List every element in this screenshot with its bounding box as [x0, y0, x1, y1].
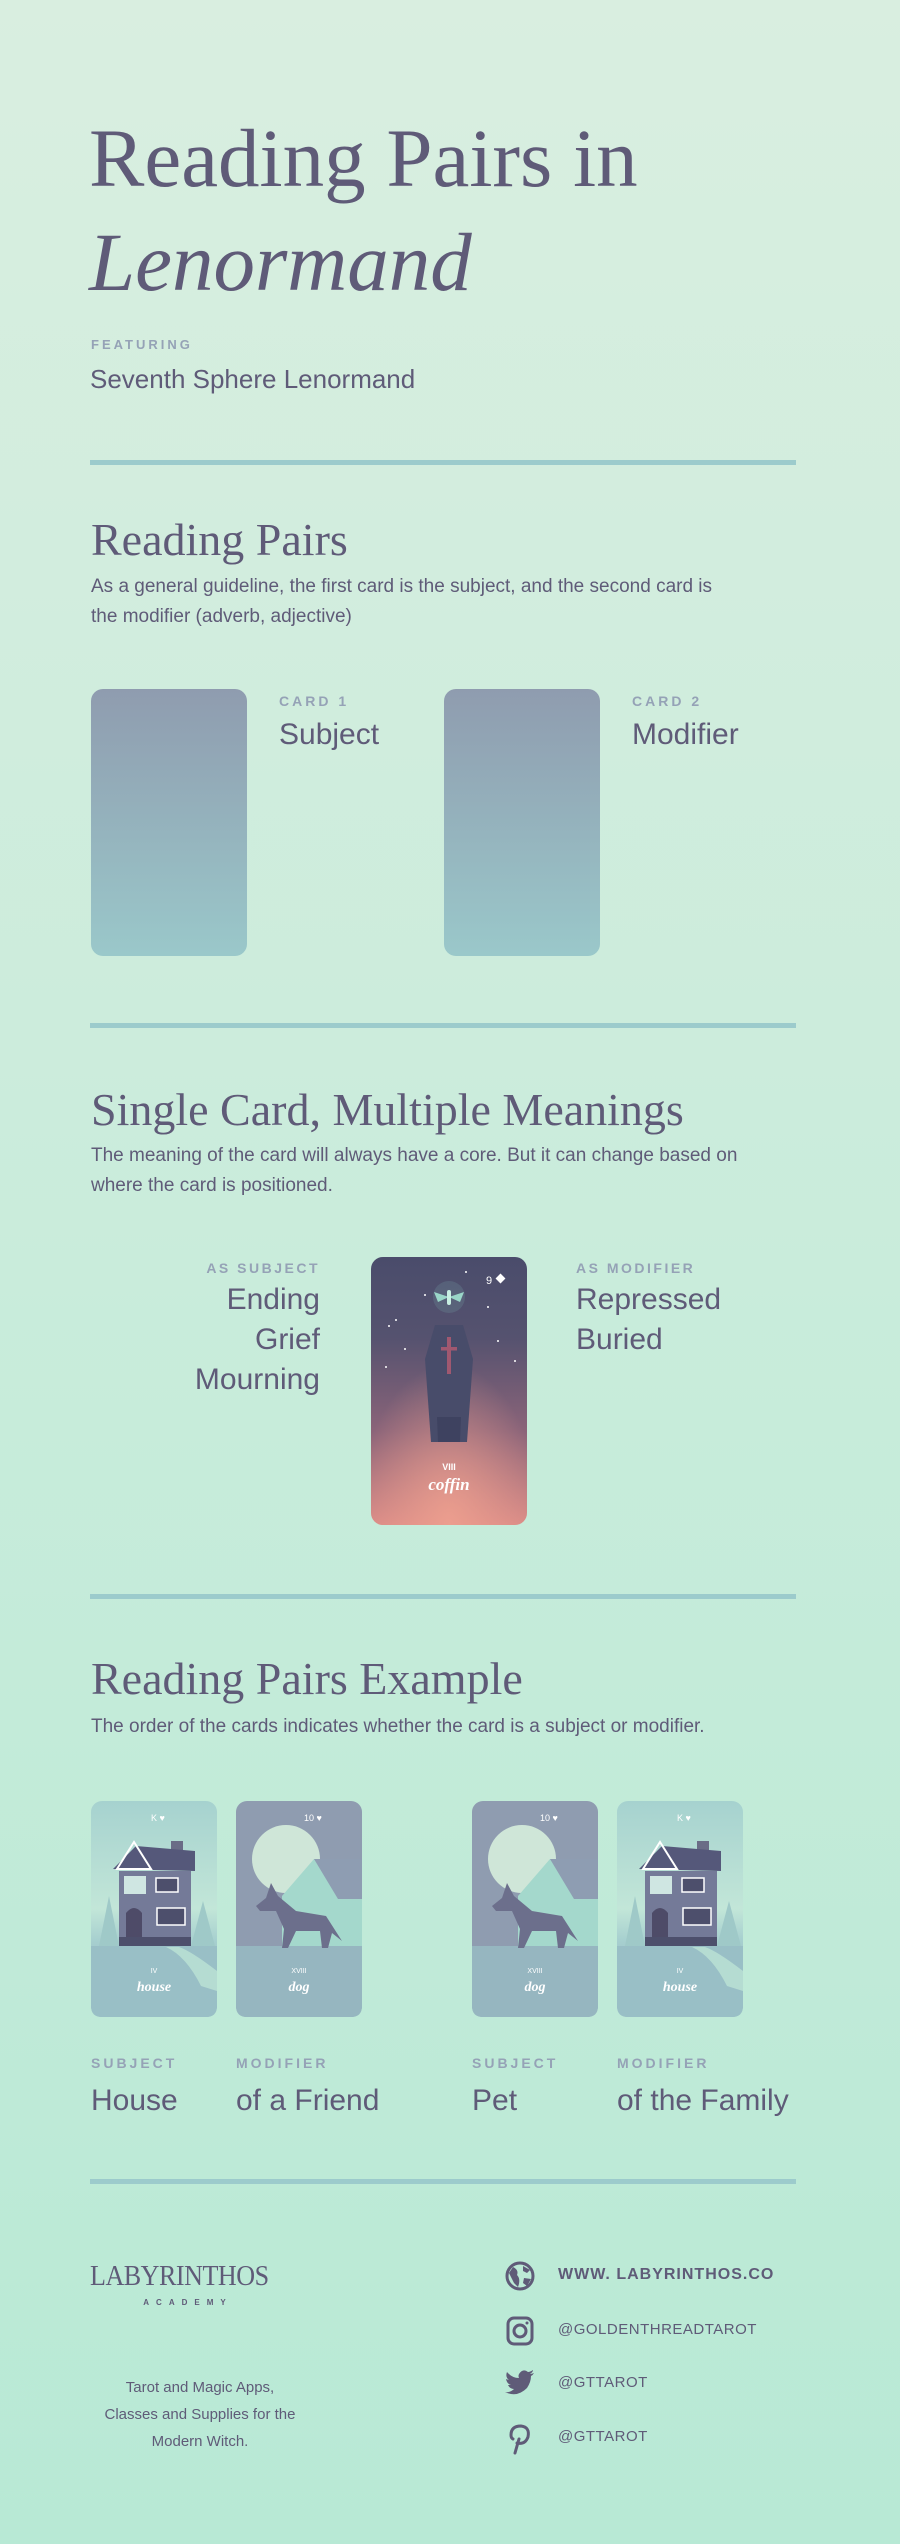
heading: single card: Single Card, Multiple Meanings — [91, 1084, 684, 1135]
icon: instagram — [506, 2316, 534, 2346]
as subject meanings: Grief — [255, 1323, 320, 1356]
card: house — [91, 1801, 217, 2017]
icon: pinterest — [510, 2424, 530, 2454]
example pair 1: House — [91, 2084, 178, 2117]
example pair 2: MODIFIER — [617, 2055, 709, 2071]
card: house: K ♥ — [677, 1813, 691, 1823]
social links — [505, 2262, 774, 2454]
paragraph: single card: where the card is positioned. — [91, 1175, 333, 1196]
example pair 1: of a Friend — [236, 2084, 379, 2117]
paragraph: reading pairs — [91, 576, 712, 627]
example pair 1 — [91, 1801, 379, 2117]
tagline: Classes and Supplies for the — [105, 2406, 295, 2423]
tagline: Modern Witch. — [152, 2433, 248, 2450]
as subject meanings: Mourning — [195, 1363, 320, 1396]
title: Reading Pairs in — [89, 112, 638, 204]
card: dog — [236, 1801, 362, 2017]
paragraph: reading pairs: the modifier (adverb, adjective) — [91, 606, 352, 627]
tagline — [105, 2379, 295, 2450]
card: dog: dog — [524, 1980, 546, 1995]
card: dog: XVIII — [291, 1968, 307, 1975]
card 1 text: Subject — [279, 718, 379, 751]
text: website: WWW. LABYRINTHOS.CO — [558, 2266, 774, 2283]
deck name: Seventh Sphere Lenormand — [90, 364, 415, 394]
example pair 2 — [472, 1801, 789, 2117]
featuring label: FEATURING — [91, 337, 193, 352]
heading: example: Reading Pairs Example — [91, 1653, 523, 1704]
as modifier meanings: Buried — [576, 1323, 663, 1356]
title: Lenormand — [89, 216, 472, 308]
paragraph: single card — [91, 1145, 737, 1196]
card 1 blank — [91, 689, 247, 956]
coffin card — [371, 1257, 527, 1525]
title — [88, 112, 638, 308]
card: dog: 10 ♥ — [540, 1813, 558, 1823]
example pair 2: Pet — [472, 2084, 517, 2117]
logo — [90, 2261, 269, 2307]
card: house: IV — [677, 1968, 684, 1975]
logo: ACADEMY — [143, 2298, 233, 2307]
card 2 text — [632, 693, 739, 751]
labels pair 2: SUBJECT — [472, 2055, 558, 2071]
as subject meanings — [195, 1260, 320, 1396]
card 2 text: Modifier — [632, 718, 739, 751]
card 2 text: CARD 2 — [632, 693, 702, 709]
icon: twitter — [505, 2370, 534, 2394]
card: house: K ♥ — [151, 1813, 165, 1823]
card: house: IV — [151, 1968, 158, 1975]
card 2 blank — [444, 689, 600, 956]
heading: reading pairs: Reading Pairs — [91, 514, 348, 565]
card: dog: XVIII — [527, 1968, 543, 1975]
as modifier meanings: AS MODIFIER — [576, 1260, 695, 1276]
card: house: house — [137, 1980, 171, 1995]
example pair 1: MODIFIER — [236, 2055, 328, 2071]
paragraph: example: The order of the cards indicates whether the card is a subject or modifier. — [91, 1716, 705, 1737]
logo: LABYRINTHOS — [90, 2261, 269, 2292]
coffin card: coffin — [428, 1475, 470, 1494]
example pair 2: of the Family — [617, 2084, 789, 2117]
text: instagram: @GOLDENTHREADTAROT — [558, 2321, 757, 2338]
labels pair 1: SUBJECT — [91, 2055, 177, 2071]
text: twitter: @GTTAROT — [558, 2374, 648, 2391]
card: dog: 10 ♥ — [304, 1813, 322, 1823]
as modifier meanings — [576, 1260, 721, 1356]
paragraph: single card: The meaning of the card will always have a core. But it can change based on — [91, 1145, 737, 1166]
card: dog: dog — [288, 1980, 310, 1995]
as subject meanings: Ending — [227, 1283, 320, 1316]
card: dog — [472, 1801, 598, 2017]
icon: globe — [506, 2262, 534, 2290]
card 1 text — [279, 693, 379, 751]
card: house — [617, 1801, 743, 2017]
card: house: house — [663, 1980, 697, 1995]
coffin card: VIII — [442, 1462, 456, 1472]
as subject meanings: AS SUBJECT — [206, 1260, 320, 1276]
coffin card: 9 — [486, 1275, 492, 1287]
card 1 text: CARD 1 — [279, 693, 349, 709]
paragraph: reading pairs: As a general guideline, the first card is the subject, and the second card is — [91, 576, 712, 597]
as modifier meanings: Repressed — [576, 1283, 721, 1316]
text: pinterest: @GTTAROT — [558, 2428, 648, 2445]
tagline: Tarot and Magic Apps, — [126, 2379, 274, 2396]
